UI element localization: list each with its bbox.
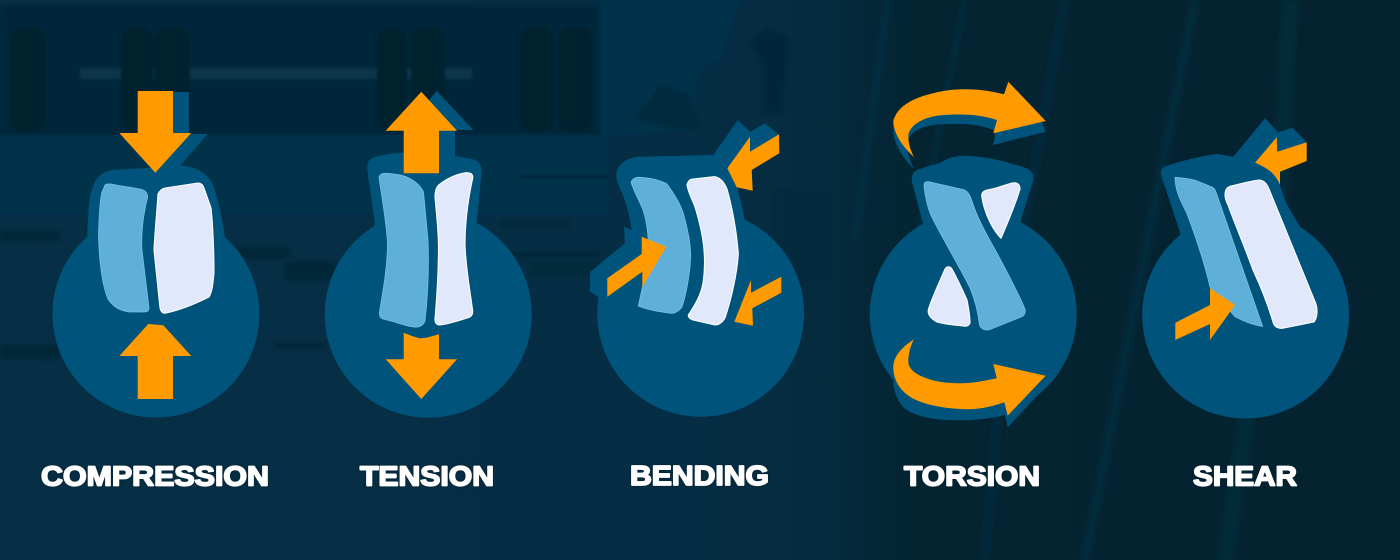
label: tension: TENSION (360, 460, 494, 492)
tension white disc half (435, 173, 473, 325)
diagram: compression (52, 91, 259, 418)
shear top arrow (1255, 137, 1307, 185)
torsion top white wedge (982, 183, 1020, 238)
compression light disc half (98, 184, 149, 312)
bending bottom right arrow (734, 277, 781, 326)
shear light disc half (1175, 177, 1263, 326)
compression arrow shadow (160, 92, 208, 167)
bending light disc half (631, 177, 691, 313)
tension bottom arrow (386, 333, 457, 399)
torsion bottom white wedge (928, 267, 970, 326)
diagram: shear (1142, 118, 1349, 419)
bending left arrow (607, 237, 666, 297)
tension light disc half (379, 173, 428, 327)
torsion bottom arrow (893, 339, 1046, 416)
tension arrow shadow (425, 91, 473, 160)
label: bending: BENDING (630, 460, 769, 491)
torsion top arrow shadow (893, 110, 1046, 169)
diagram: torsion (870, 82, 1077, 427)
torsion top arrow (893, 82, 1046, 157)
label: torsion: TORSION (904, 460, 1040, 492)
diagram: tension (325, 91, 532, 418)
bending white disc half (687, 177, 738, 325)
shear backing circle and body (1142, 118, 1349, 419)
compression top arrow (119, 91, 191, 173)
label: shear: SHEAR (1193, 460, 1297, 492)
compression white disc half (154, 183, 214, 313)
tension top arrow (386, 92, 457, 173)
tension backing circle and body (325, 153, 532, 418)
torsion light band (924, 182, 1025, 330)
bending backing circle and body (590, 120, 804, 417)
bending top right arrow (727, 134, 779, 191)
shear white disc half (1225, 180, 1317, 328)
torsion backing circle and body (870, 156, 1077, 418)
compression backing circle and body (52, 166, 259, 418)
torsion bottom arrow shadow (893, 370, 1046, 427)
compression bottom arrow (119, 324, 191, 399)
shear bottom arrow (1175, 288, 1235, 340)
label: compression: COMPRESSION (41, 460, 269, 492)
diagram: bending (590, 120, 804, 417)
